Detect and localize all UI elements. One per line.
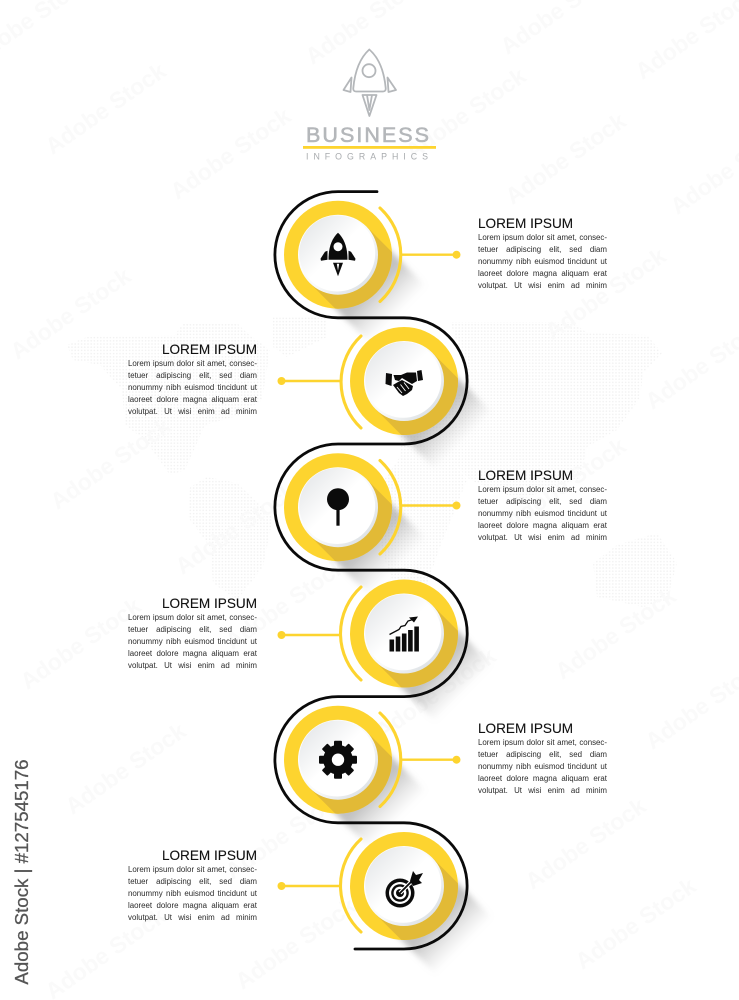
step 6 circle: target <box>350 832 494 976</box>
background: dotted world map and watermarks: Adobe Stock <box>170 477 301 579</box>
text block 1: tetuer adipiscing elit, sed diam <box>478 245 607 254</box>
text block 4: volutpat. Ut wisi enim ad minim <box>128 661 257 670</box>
text block 3: laoreet dolore magna aliquam erat <box>478 521 607 530</box>
step 1 arc and connector <box>380 208 460 302</box>
step 3 arc and connector <box>380 460 460 554</box>
step 2 arc and connector <box>278 336 361 428</box>
step 4 circle: growth chart <box>350 580 494 724</box>
background: dotted world map and watermarks: Adobe Stock <box>220 552 351 654</box>
step 6 arc <box>278 839 361 932</box>
background: dotted world map and watermarks: Adobe Stock <box>230 892 361 994</box>
text block 4 <box>128 595 257 670</box>
background: dotted world map and watermarks: Adobe Stock <box>550 582 681 684</box>
text block 1: volutpat. Ut wisi enim ad minim <box>478 281 607 290</box>
text block 4: LOREM IPSUM <box>162 595 257 611</box>
step 2 circle: handshake <box>350 327 494 471</box>
icon: bar chart with arrow <box>390 616 419 652</box>
step 5 circle: gear <box>284 706 428 850</box>
icon: handshake <box>386 370 423 396</box>
background: dotted world map and watermarks: Adobe Stock <box>520 792 651 894</box>
icon: logo rocket <box>344 50 396 116</box>
background: dotted world map and watermarks: Adobe Stock <box>165 102 296 204</box>
text block 2: Lorem ipsum dolor sit amet, consec- <box>128 359 257 368</box>
text block 5: LOREM IPSUM <box>478 720 573 736</box>
text block 4: Lorem ipsum dolor sit amet, consec- <box>128 613 257 622</box>
icon: rocket <box>320 233 356 276</box>
text block 5: volutpat. Ut wisi enim ad minim <box>478 786 607 795</box>
text block 6: volutpat. Ut wisi enim ad minim <box>128 913 257 922</box>
timeline serpentine path <box>275 192 467 949</box>
icon: target and dart <box>386 871 423 908</box>
text block 6: LOREM IPSUM <box>162 847 257 863</box>
text block 5: laoreet dolore magna aliquam erat <box>478 774 607 783</box>
background: dotted world map and watermarks: Adobe Stock <box>15 592 146 694</box>
text block 4: tetuer adipiscing elit, sed diam <box>128 625 257 634</box>
text block 1: laoreet dolore magna aliquam erat <box>478 269 607 278</box>
text block 1: LOREM IPSUM <box>478 215 573 231</box>
text block 2: tetuer adipiscing elit, sed diam <box>128 371 257 380</box>
step 5 arc and connector <box>380 713 460 806</box>
text block 2: nonummy nibh euismod tincidunt ut <box>128 383 257 392</box>
text block 4: laoreet dolore magna aliquam erat <box>128 649 257 658</box>
background: dotted world map and watermarks: Adobe Stock <box>45 412 176 514</box>
text block 1: Lorem ipsum dolor sit amet, consec- <box>478 233 607 242</box>
text block 3: Lorem ipsum dolor sit amet, consec- <box>478 485 607 494</box>
stock credit text: Adobe Stock | #127545176 <box>11 759 32 985</box>
text block 6: tetuer adipiscing elit, sed diam <box>128 877 257 886</box>
background: dotted world map and watermarks: Adobe Stock <box>540 242 671 344</box>
logo word: infographics: INFOGRAPHICS <box>306 152 428 162</box>
text block 1 <box>478 215 607 290</box>
icon: pin <box>327 488 349 526</box>
text block 6: Lorem ipsum dolor sit amet, consec- <box>128 865 257 874</box>
text block 2: volutpat. Ut wisi enim ad minim <box>128 407 257 416</box>
logo word: business: BUSINESS <box>306 123 429 147</box>
step 4 arc and connector <box>278 587 361 680</box>
text block 3: tetuer adipiscing elit, sed diam <box>478 497 607 506</box>
text block 5 <box>478 720 607 795</box>
logo <box>303 50 436 162</box>
main artwork: logo, timeline path and step circles <box>274 48 485 966</box>
icon: gear <box>319 741 357 779</box>
text block 3: volutpat. Ut wisi enim ad minim <box>478 533 607 542</box>
step 1 circle: rocket <box>284 201 428 345</box>
background: dotted world map and watermarks: Adobe Stock <box>5 262 136 364</box>
text block 2: laoreet dolore magna aliquam erat <box>128 395 257 404</box>
step 3 circle: keyhole pin <box>284 453 428 597</box>
background: dotted world map and watermarks: Adobe Stock <box>60 717 191 819</box>
text block 6: laoreet dolore magna aliquam erat <box>128 901 257 910</box>
background: dotted world map and watermarks: Adobe Stock <box>370 642 501 744</box>
text block 3 <box>478 467 607 542</box>
text block 2 <box>128 341 257 416</box>
text block 1: nonummy nibh euismod tincidunt ut <box>478 257 607 266</box>
text block 5: Lorem ipsum dolor sit amet, consec- <box>478 738 607 747</box>
text block 6 <box>128 847 257 922</box>
text block 5: tetuer adipiscing elit, sed diam <box>478 750 607 759</box>
background: dotted world map and watermarks: Adobe Stock <box>220 782 351 884</box>
text block 3: nonummy nibh euismod tincidunt ut <box>478 509 607 518</box>
text block 2: LOREM IPSUM <box>162 341 257 357</box>
background: dotted world map and watermarks: Adobe Stock <box>40 57 171 159</box>
text block 4: nonummy nibh euismod tincidunt ut <box>128 637 257 646</box>
text block 3: LOREM IPSUM <box>478 467 573 483</box>
background: dotted world map and watermarks: Adobe Stock <box>400 62 531 164</box>
background: dotted world map and watermarks: Adobe Stock <box>570 872 701 974</box>
text block 6: nonummy nibh euismod tincidunt ut <box>128 889 257 898</box>
background: dotted world map and watermarks: Adobe Stock <box>500 432 631 534</box>
text block 5: nonummy nibh euismod tincidunt ut <box>478 762 607 771</box>
background: dotted world map and watermarks: Adobe Stock <box>500 107 631 209</box>
